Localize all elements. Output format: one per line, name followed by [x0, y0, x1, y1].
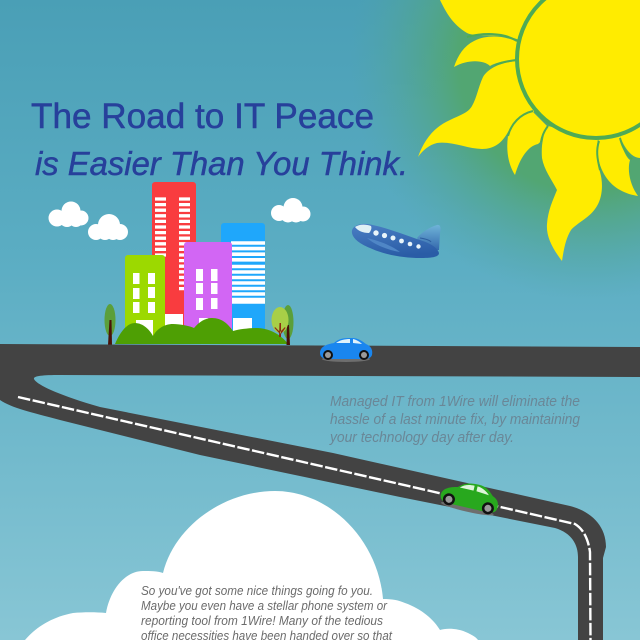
- icon: sun: [418, 0, 640, 261]
- road: centre dashes: [18, 397, 590, 640]
- text: cloud paragraph: So you've got some nice things going fo you.: [141, 583, 373, 598]
- tree: right: [272, 305, 294, 345]
- sun glow: [300, 0, 640, 320]
- building: green: [125, 255, 165, 343]
- building: red tower: [152, 182, 196, 332]
- title: is Easier Than You Think.: [35, 145, 408, 182]
- icon: green car: [438, 477, 502, 518]
- cloud: small right: [271, 198, 310, 222]
- building: purple: [184, 242, 232, 334]
- text: cloud paragraph: [141, 583, 393, 640]
- title: [31, 97, 408, 182]
- road: [0, 344, 640, 640]
- building: blue tower: [221, 223, 265, 333]
- title: The Road to IT Peace: [31, 97, 374, 136]
- text: managed IT description: hassle of a last minute fix, by maintaining: [330, 412, 580, 428]
- icon: blue car: [320, 338, 372, 362]
- text: managed IT description: Managed IT from 1Wire will eliminate the: [330, 394, 580, 410]
- buildings: [115, 182, 288, 344]
- tree: left: [104, 304, 116, 345]
- hills: [115, 318, 288, 344]
- icon: airplane: [352, 224, 441, 258]
- cloud: small middle: [88, 214, 128, 240]
- text: managed IT description: your technology day after day.: [329, 430, 514, 446]
- text: managed IT description: [329, 394, 580, 446]
- large white cloud: [25, 491, 478, 640]
- cloud: small left: [48, 202, 88, 227]
- text: cloud paragraph: reporting tool from 1Wire! Many of the tedious: [141, 613, 383, 628]
- text: cloud paragraph: Maybe you even have a stellar phone system or: [141, 598, 388, 613]
